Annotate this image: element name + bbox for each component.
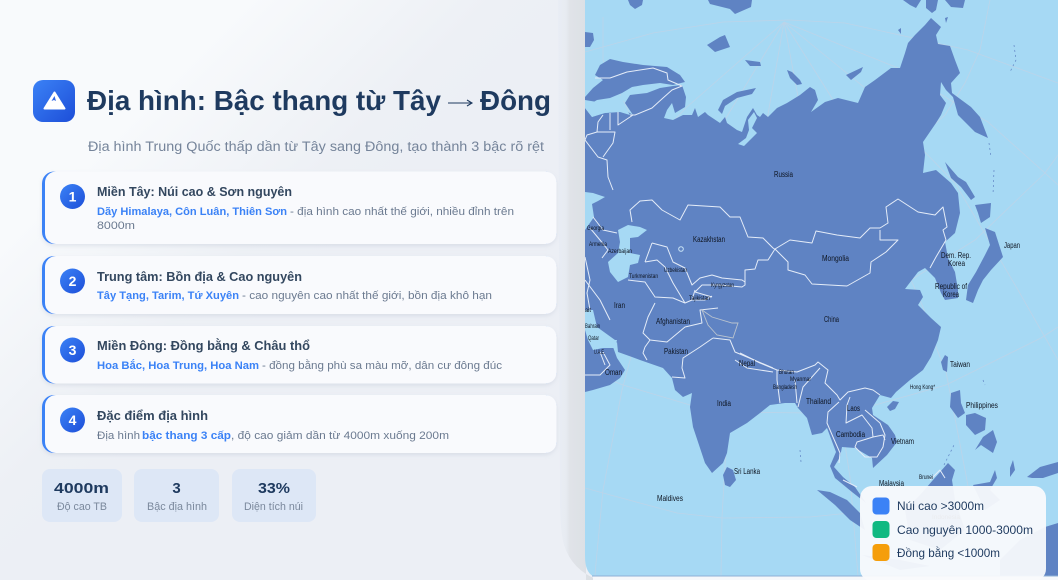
stat: mountain area: Diện tích núi — [244, 501, 303, 513]
panel: card 3 eastern plains — [42, 326, 556, 384]
panel: card 4 terrain features: Địa hình — [97, 430, 140, 442]
country labels: Thailand — [806, 397, 831, 406]
country labels: Republic of — [935, 282, 968, 291]
stat: terrain steps — [134, 469, 219, 522]
country labels: Turkmenistan — [629, 273, 658, 280]
legend item: plains — [872, 544, 1000, 561]
panel: card 3 eastern plains: Hoa Bắc, Hoa Trung, Hoa Nam — [97, 359, 259, 372]
panel: card 3 eastern plains: Miền Đông: Đồng bằng & Châu thổ — [97, 338, 310, 353]
stat: average elevation: Độ cao TB — [57, 501, 107, 513]
country labels: Korea — [943, 290, 959, 299]
country labels: Afghanistan — [656, 317, 690, 326]
small island chains — [800, 45, 1016, 465]
country labels: Qatar — [588, 335, 600, 342]
Scandinavia — [585, 59, 685, 102]
panel: card 3 eastern plains: - đồng bằng phù sa màu mỡ, dân cư đông đúc — [262, 359, 503, 372]
country labels: Bhutan — [779, 369, 794, 376]
country labels: Brunei — [919, 474, 933, 481]
legend item: mountains: Núi cao >3000m — [897, 499, 984, 513]
country labels: Russia — [774, 170, 793, 179]
country labels: Myanmar — [790, 376, 812, 383]
map legend — [860, 486, 1046, 580]
country labels: Iran — [614, 301, 625, 310]
country labels: Armenia — [589, 241, 607, 248]
panel: card 1 western mountains: 8000m — [97, 220, 135, 232]
title: Địa hình: Bậc thang từ Tây — [87, 85, 441, 116]
country labels: Bangladesh — [773, 384, 797, 391]
stat: mountain area: 33% — [258, 480, 290, 497]
country labels — [585, 170, 1020, 521]
Sri Lanka — [723, 467, 736, 487]
country labels: U.A.E. — [594, 349, 605, 356]
legend item: plateaus: Cao nguyên 1000-3000m — [897, 523, 1033, 537]
stat: terrain steps: 3 — [172, 480, 181, 497]
panel: card 2 central basins: Trung tâm: Bồn địa & Cao nguyên — [97, 269, 302, 284]
country labels: Oman — [605, 368, 622, 377]
graticule — [585, 0, 1058, 576]
country labels: Philippines — [966, 401, 998, 410]
country labels: Malaysia — [879, 479, 904, 488]
country labels: Hong Kong* — [910, 384, 935, 391]
country labels: Nepal — [739, 359, 755, 368]
country labels: Georgia — [587, 225, 604, 232]
Taiwan, Hainan, Philippines — [941, 355, 948, 372]
stat: average elevation: 4000m — [54, 480, 109, 497]
country borders — [585, 68, 947, 487]
country labels: Japan — [1004, 241, 1020, 250]
panel: card 1 western mountains: - địa hình cao nhất thế giới, nhiều đỉnh trên — [290, 206, 514, 218]
legend item: mountains — [872, 498, 984, 514]
panel: card 1 western mountains: Miền Tây: Núi cao & Sơn nguyên — [97, 184, 292, 199]
legend item: plateaus — [872, 521, 1033, 538]
land masses — [585, 0, 1058, 576]
panel: card 2 central basins: - cao nguyên cao nhất thế giới, bồn địa khô hạn — [242, 290, 492, 302]
panel: card 1 western mountains: 1 — [69, 188, 77, 204]
country labels: India — [717, 399, 731, 408]
country labels: Kazakhstan — [693, 235, 725, 244]
panel: card 1 western mountains — [42, 172, 556, 244]
panel: card 1 western mountains: Dãy Himalaya, Côn Luân, Thiên Sơn — [97, 206, 287, 218]
panel: card 4 terrain features — [42, 395, 556, 453]
inland seas — [585, 94, 757, 350]
disputed borders — [702, 310, 738, 338]
country labels: Maldives — [657, 494, 683, 503]
country labels: Pakistan — [664, 347, 688, 356]
country labels: Indonesia — [932, 514, 960, 521]
country labels: Cambodia — [836, 430, 865, 439]
panel: card 2 central basins: 2 — [69, 273, 77, 289]
icon: mountain — [33, 80, 75, 122]
country labels: Bahrain — [585, 323, 600, 330]
Sakhalin, Hokkaido, Honshu — [945, 162, 975, 200]
panel: card 4 terrain features: 4 — [69, 412, 77, 428]
country labels: Taiwan — [950, 360, 970, 369]
panel: card 4 terrain features: , độ cao giảm dần từ 4000m xuống 200m — [231, 430, 449, 442]
stat: terrain steps: Bậc địa hình — [147, 501, 207, 513]
country labels: Kyrgyzstan — [711, 282, 734, 289]
country labels: Dem. Rep. — [941, 251, 971, 260]
stat: mountain area — [232, 469, 316, 522]
country labels: Sri Lanka — [734, 467, 760, 476]
stat: average elevation — [42, 469, 122, 522]
country labels: Korea — [948, 259, 965, 268]
Eurasia mainland — [585, 18, 988, 503]
country labels: China — [824, 315, 839, 324]
country labels: Mongolia — [822, 254, 849, 263]
Indonesia and Borneo — [928, 463, 955, 486]
subtitle: Địa hình Trung Quốc thấp dần từ Tây sang Đông, tạo thành 3 bậc rõ rệt — [88, 139, 544, 154]
country labels: Vietnam — [891, 437, 914, 446]
country labels: Laos — [847, 404, 860, 413]
country labels: Uzbekistan — [664, 267, 687, 274]
country labels: Tajikistan — [689, 295, 710, 302]
country labels: ait — [585, 307, 591, 314]
title: Đông — [480, 85, 551, 116]
panel: card 2 central basins: Tây Tạng, Tarim, Tứ Xuyên — [97, 290, 239, 302]
legend item: plains: Đồng bằng <1000m — [897, 545, 1000, 560]
country labels: Azerbaijan — [608, 248, 632, 255]
panel: card 2 central basins — [42, 256, 556, 314]
panel: card 3 eastern plains: 3 — [69, 342, 77, 358]
Arctic islands — [718, 88, 756, 114]
map panel edge shadow — [558, 0, 598, 580]
map bottom edge — [592, 575, 1058, 577]
panel: card 4 terrain features: bậc thang 3 cấp — [142, 430, 231, 442]
map panel — [585, 0, 1058, 576]
panel: card 4 terrain features: Đặc điểm địa hình — [97, 408, 208, 423]
